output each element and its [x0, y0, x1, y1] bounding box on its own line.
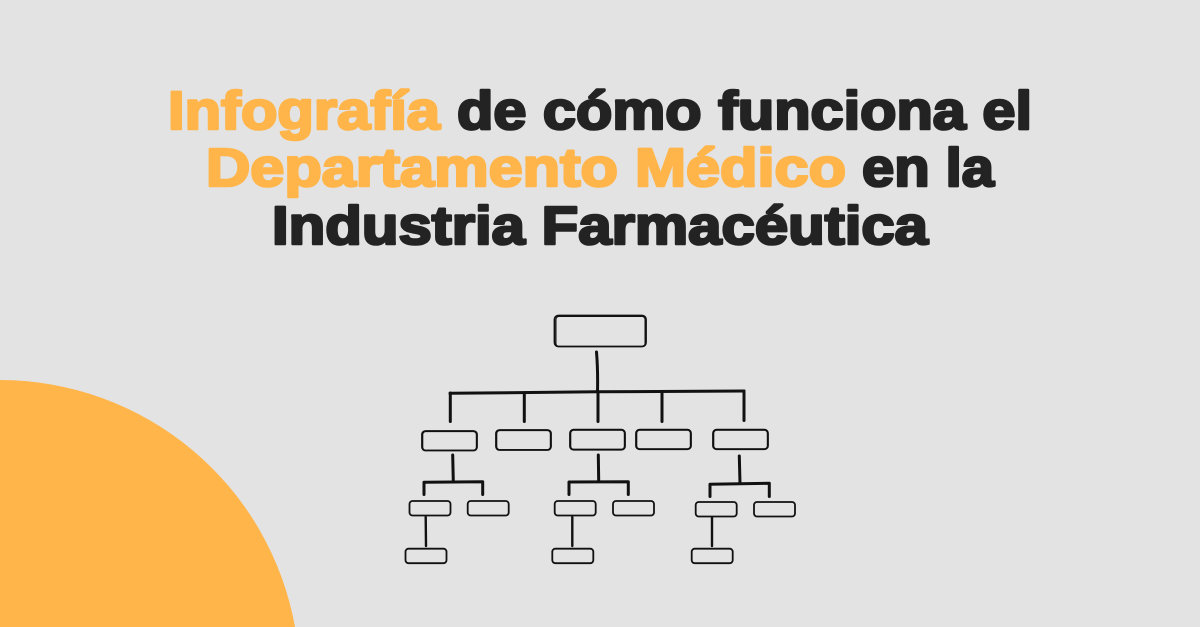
fourth row boxes — [406, 549, 733, 563]
organization chart — [406, 316, 795, 563]
decorative orange circle — [0, 380, 295, 627]
second row boxes — [422, 430, 768, 450]
third row boxes — [410, 501, 795, 516]
title: Infografía — [168, 81, 441, 141]
title: Industria Farmacéutica — [272, 196, 929, 256]
second level connectors — [424, 455, 769, 496]
title: de cómo funciona el — [457, 81, 1032, 141]
third level connectors — [426, 517, 712, 546]
title — [168, 81, 1032, 256]
main connectors — [450, 352, 744, 422]
title: en la — [862, 138, 995, 198]
title: Departamento Médico — [206, 138, 846, 198]
top box — [554, 316, 646, 346]
